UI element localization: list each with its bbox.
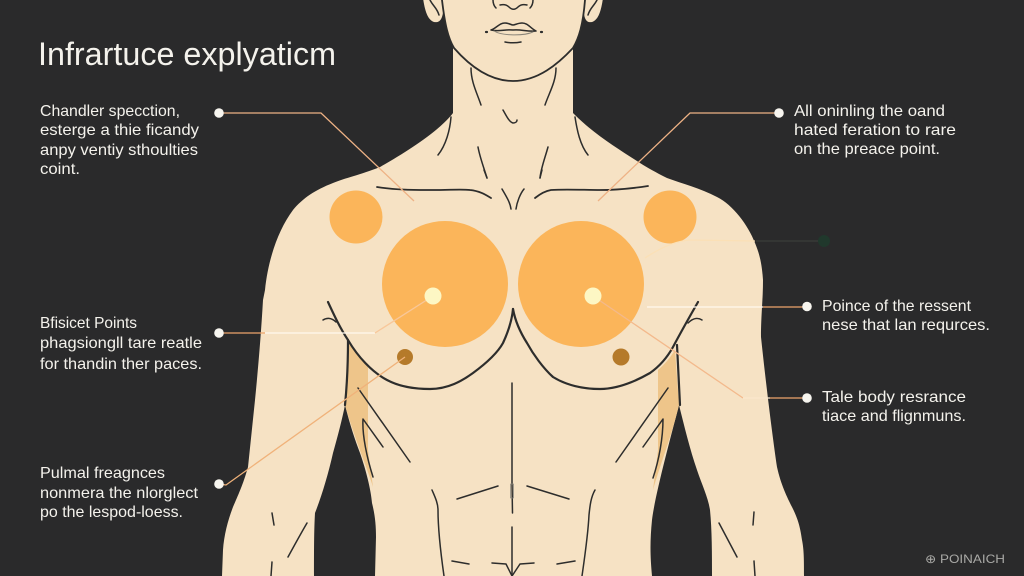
text block: middle right: Poince of the ressent [822, 298, 972, 315]
abdomen [432, 383, 595, 576]
text block: top right [794, 103, 956, 158]
text block: top left: esterge a thie ficandy [40, 122, 199, 139]
connector: top left [219, 113, 414, 201]
text block: middle left [40, 315, 202, 373]
connector: middle right [647, 306, 807, 308]
side shading [345, 340, 679, 490]
text block: middle right: nese that lan requrces. [822, 317, 990, 334]
text block: lower right: tiace and flignmuns. [822, 408, 966, 425]
text block: bottom left [40, 465, 199, 521]
text block: lower right [822, 389, 966, 425]
point dots [424, 288, 602, 304]
arm lines [271, 512, 755, 576]
text block: top right: hated feration to rare [794, 122, 956, 139]
rib lines [358, 388, 668, 478]
ears [423, 0, 603, 22]
text block: middle left: phagsiongll tare reatle [40, 335, 202, 352]
connector: faded right [645, 240, 820, 258]
right shoulder point [644, 190, 696, 244]
brown markers [397, 348, 630, 366]
title: Infrartuce explyaticm [38, 36, 336, 72]
text block: bottom left: nonmera the nlorglect [40, 485, 199, 502]
collar [377, 170, 648, 209]
connector lines [219, 113, 820, 485]
connector: bottom left [219, 357, 405, 485]
body silhouette [222, 0, 804, 576]
watermark: ⊕ POINAICH [925, 552, 1005, 566]
text block: top right: on the preace point. [794, 141, 940, 158]
illustration: human torso [222, 0, 804, 576]
text block: middle left: Bfisicet Points [40, 315, 137, 332]
face [430, 0, 597, 81]
text block: bottom left: po the lespod-loess. [40, 504, 183, 521]
connector end dots [214, 108, 830, 489]
text block: top left [40, 103, 199, 178]
connector: middle left [219, 296, 433, 333]
left shoulder point [330, 190, 382, 244]
anatomy lines [271, 0, 755, 576]
text block: top left: coint. [40, 161, 80, 178]
text block: top left: Chandler specction, [40, 103, 180, 120]
connector: top right [598, 113, 779, 201]
text block: bottom left: Pulmal freagnces [40, 465, 165, 482]
text block: lower right: Tale body resrance [822, 389, 966, 406]
right chest zone [518, 221, 644, 347]
left chest zone [382, 221, 508, 347]
text block: middle right [822, 298, 990, 334]
connector: lower right [593, 296, 807, 398]
text block: top right: All oninling the oand [794, 103, 945, 120]
highlight circles [330, 190, 696, 347]
chest curves [323, 302, 702, 405]
text block: middle left: for thandin ther paces. [40, 356, 202, 373]
text block: top left: anpy ventiy sthoulties [40, 142, 198, 159]
neck [438, 68, 588, 178]
